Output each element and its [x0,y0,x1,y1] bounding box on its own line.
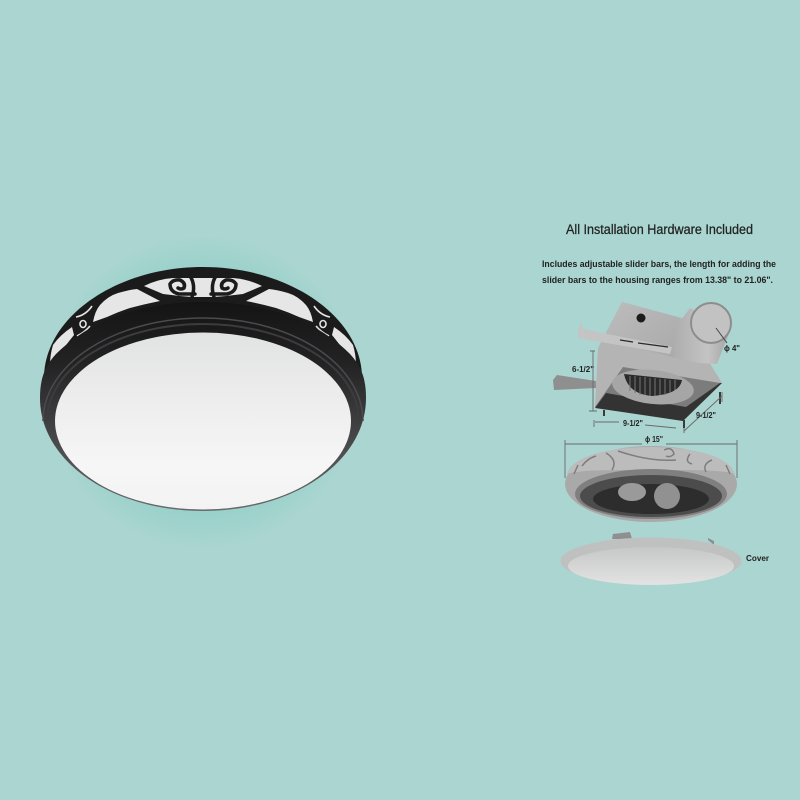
heading: All Installation Hardware Included [566,222,753,237]
dimension lines: housing [589,351,722,433]
housing body [595,302,722,421]
outer rim [40,302,366,511]
cover clips [612,532,714,545]
fan opening ring [610,366,696,408]
lower slider bar [553,375,596,390]
scroll ornaments [170,276,236,297]
label: diameter 15: ϕ 15" [645,435,663,444]
exploded ring [565,446,737,522]
label: 9-1/2 front: 9-1/2" [623,419,643,428]
label: cover: Cover [746,553,770,563]
fan blades [624,374,682,396]
hole in top [636,314,646,322]
top face [603,302,680,358]
ring ornament [574,449,730,474]
cover [560,532,742,585]
mounting bolts [604,392,720,428]
base plate [595,383,722,421]
upper slider bar [578,322,672,354]
description text [542,259,776,286]
ring inner frame [575,469,727,519]
label: 6-1/2: 6-1/2" [572,365,594,374]
duct pointer [716,328,727,343]
small side ornaments [76,306,330,336]
cover disc [560,538,742,584]
description text: Includes adjustable slider bars, the length for adding the [542,259,776,270]
fan opening frame [595,367,720,420]
rim highlights [43,318,363,421]
light bulbs [618,483,646,501]
duct body [673,308,731,364]
ring top band [567,447,735,474]
ring body [565,446,737,522]
white panels in band [50,278,356,365]
duct opening [691,303,731,343]
ceiling light fixture [40,267,366,511]
fan housing diagram [553,302,731,428]
dimension line: 15 inch [565,440,737,478]
label: diameter 4: ϕ 4" [724,344,740,353]
glow circle behind fixture [48,237,358,547]
glass lens [55,332,351,510]
black decorative band [44,267,362,378]
description text: slider bars to the housing ranges from 13.38" to 21.06". [542,275,773,286]
label: 9-1/2 side: 9-1/2" [696,411,716,420]
